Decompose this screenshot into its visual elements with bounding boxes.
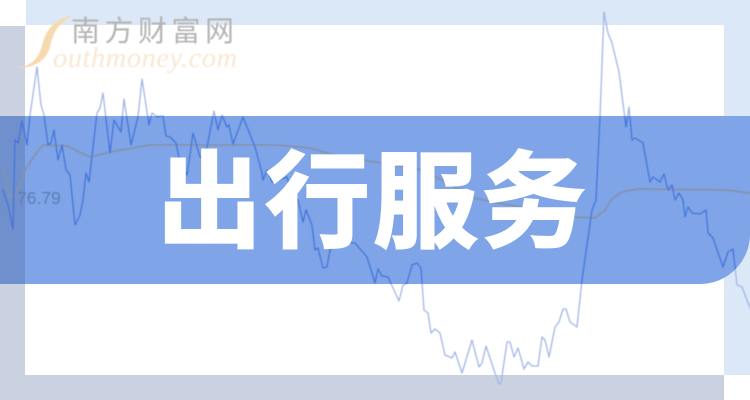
chart value label: 76.79 bbox=[17, 188, 61, 208]
logo domain: outhmoney.com bbox=[53, 43, 238, 74]
moving average line bbox=[3, 145, 750, 218]
icon: S swoosh bbox=[17, 15, 75, 68]
price line on banner bbox=[2, 115, 736, 285]
watermark logo bbox=[17, 15, 239, 74]
title: 出行服务 bbox=[157, 145, 589, 262]
logo Chinese name: 南方财富网 bbox=[71, 15, 239, 48]
blue title banner bbox=[0, 116, 750, 284]
